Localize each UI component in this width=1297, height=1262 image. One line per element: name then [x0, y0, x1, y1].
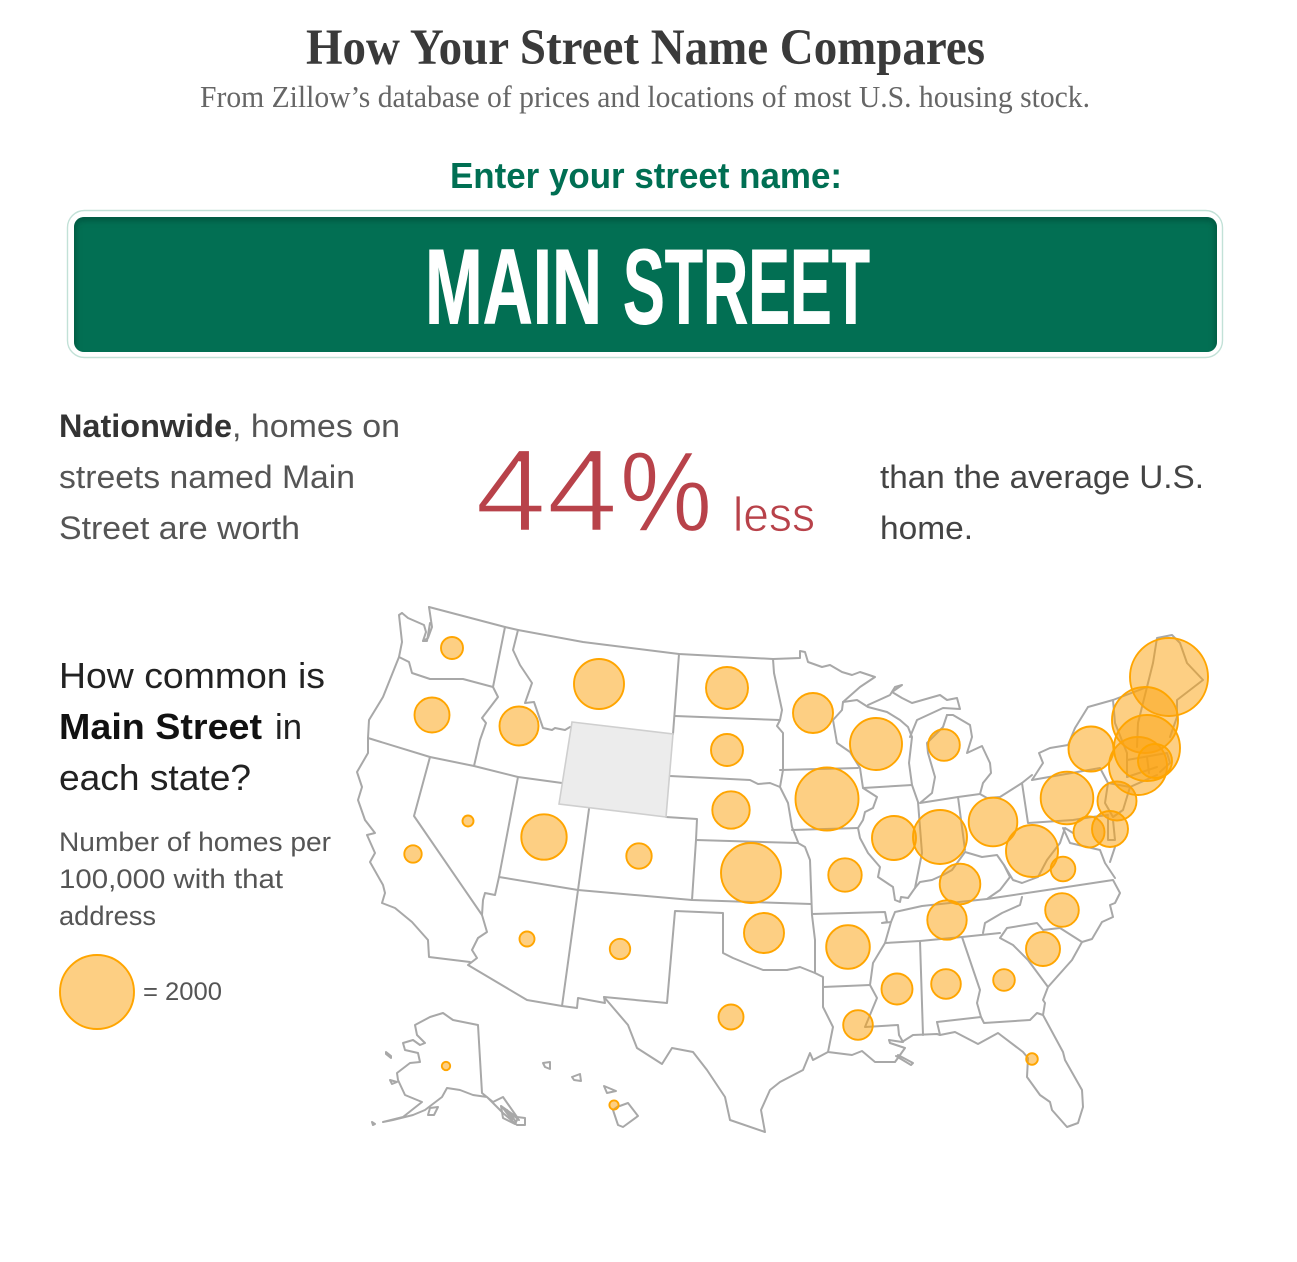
statistic: 44% less: [475, 425, 815, 557]
map heading: [59, 655, 325, 798]
street name: STREET: [623, 226, 870, 346]
nationwide text: streets named Main: [59, 459, 355, 495]
comparison text: than the average U.S.: [880, 459, 1204, 495]
nationwide text: , homes on: [232, 408, 400, 444]
legend description: [59, 827, 331, 931]
map of U.S. states: [357, 607, 1208, 1132]
map heading: How common is: [59, 655, 325, 696]
state bubbles: [404, 637, 1208, 1110]
Wyoming: no data: [559, 722, 673, 817]
state borders: [357, 607, 1203, 1132]
legend: bubble scale: = 2000: [143, 978, 222, 1006]
nationwide text: Street are worth: [59, 510, 300, 546]
street sign: [68, 210, 1222, 367]
legend description: address: [59, 901, 156, 931]
nationwide text: [59, 408, 400, 546]
legend description: 100,000 with that: [59, 864, 284, 894]
nationwide text: Nationwide: [59, 408, 232, 444]
statistic: 44% less: less: [733, 489, 815, 542]
statistic: 44% less: 44: [475, 425, 618, 557]
comparison text: [880, 459, 1204, 546]
map heading: each state?: [59, 757, 251, 798]
legend: bubble scale: [60, 955, 222, 1029]
street name: [425, 226, 870, 346]
title: How Your Street Name Compares: [306, 20, 985, 76]
street name: MAIN: [425, 226, 602, 346]
legend description: Number of homes per: [59, 827, 331, 857]
comparison text: home.: [880, 510, 973, 546]
map heading: in: [275, 706, 302, 747]
input prompt: Enter your street name:: [450, 155, 842, 196]
statistic: 44% less: %: [620, 429, 712, 555]
subtitle: From Zillow’s database of prices and locations of most U.S. housing stock.: [200, 79, 1090, 114]
map heading: Main Street: [59, 706, 262, 747]
